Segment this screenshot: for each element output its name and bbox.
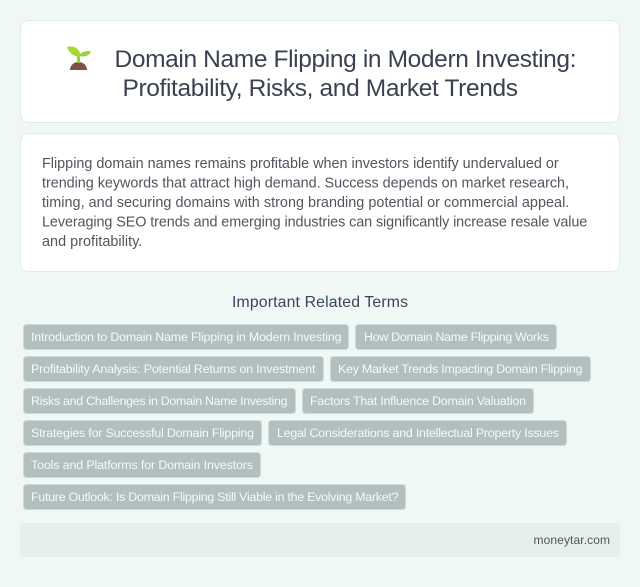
tag: future outlook: Future Outlook: Is Domain Flipping Still Viable in the Evolving Market? xyxy=(31,490,399,504)
tag: tools and platforms: Tools and Platforms for Domain Investors xyxy=(31,458,253,472)
tag: key market trends xyxy=(330,356,590,382)
tag: risks and challenges xyxy=(24,388,296,414)
tag: introduction: Introduction to Domain Name Flipping in Modern Investing xyxy=(31,330,342,344)
tag: profitability analysis xyxy=(24,356,324,382)
heading: title xyxy=(114,46,576,102)
heading: important related terms: Important Related Terms xyxy=(232,294,408,311)
tag: valuation factors: Factors That Influence Domain Valuation xyxy=(310,394,526,408)
tag: future outlook xyxy=(24,484,406,510)
tag: legal considerations: Legal Considerations and Intellectual Property Issues xyxy=(277,426,559,440)
tag: key market trends: Key Market Trends Impacting Domain Flipping xyxy=(338,362,583,376)
footer: source: moneytar.com xyxy=(534,533,610,547)
text block: intro paragraph: Leveraging SEO trends and emerging industries can significantly increase resale value xyxy=(42,214,587,230)
heading: title: Domain Name Flipping in Modern Investing: xyxy=(114,46,576,73)
tag: how it works xyxy=(356,324,556,350)
tag: legal considerations xyxy=(268,420,566,446)
text block: intro paragraph xyxy=(42,156,587,250)
heading: title: Profitability, Risks, and Market Trends xyxy=(122,75,518,102)
tag: risks and challenges: Risks and Challenges in Domain Name Investing xyxy=(31,394,288,408)
panel: intro text card xyxy=(20,134,620,272)
footer: source xyxy=(20,523,620,557)
tag: profitability analysis: Profitability Analysis: Potential Returns on Investment xyxy=(31,362,316,376)
text block: intro paragraph: timing, and securing domains with strong branding potential or commercial appeal. xyxy=(42,195,569,211)
tag: strategies: Strategies for Successful Domain Flipping xyxy=(31,426,254,440)
tag: introduction xyxy=(24,324,348,350)
panel: title card xyxy=(20,20,620,122)
tag: how it works: How Domain Name Flipping Works xyxy=(364,330,549,344)
tag: strategies xyxy=(24,420,262,446)
icon: seedling xyxy=(67,46,91,70)
text block: intro paragraph: trending keywords that attract high demand. Success depends on market research, xyxy=(42,176,569,192)
panel: related term tags xyxy=(24,324,590,510)
text block: intro paragraph: and profitability. xyxy=(42,234,142,250)
tag: tools and platforms xyxy=(24,452,260,478)
text block: intro paragraph: Flipping domain names remains profitable when investors identify undervalued or xyxy=(42,156,559,172)
tag: valuation factors xyxy=(302,388,534,414)
